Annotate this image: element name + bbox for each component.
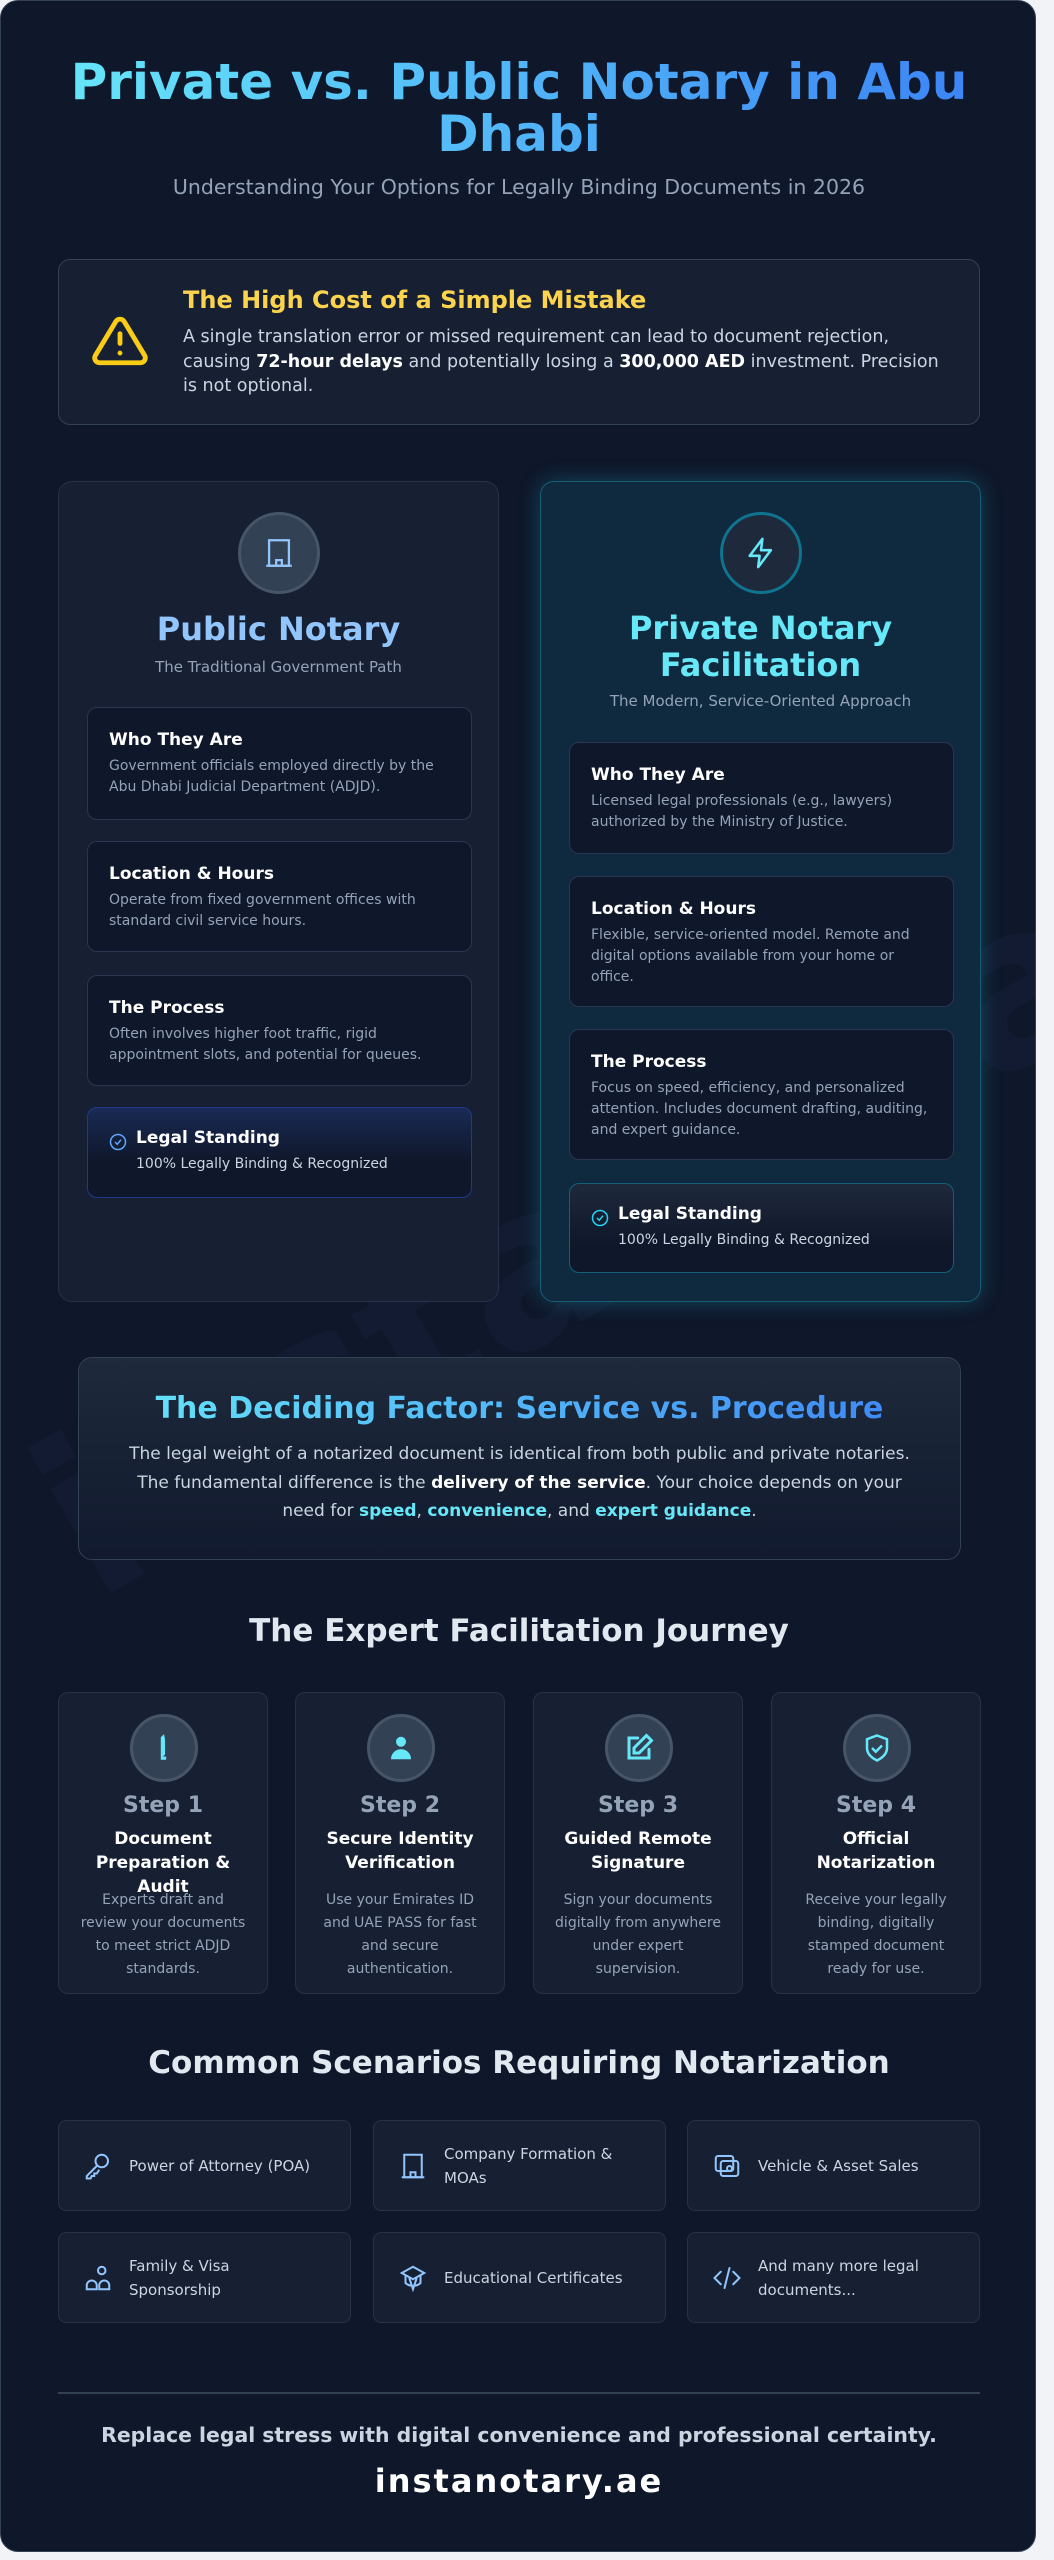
card: process: The Process [591,1052,707,1072]
panel: deciding factor [78,1357,961,1560]
scenario: family [58,2232,351,2323]
scenario: company [373,2120,666,2211]
card: location: Operate from fixed government offices with standard civil service hours. [109,892,416,929]
step 1: Document Preparation & Audit [96,1829,230,1897]
scenario: vehicle [687,2120,980,2211]
card: legal standing [569,1183,954,1273]
card: who: Government officials employed directly by the Abu Dhabi Judicial Department (ADJD). [109,758,434,795]
private subtitle: The Modern, Service-Oriented Approach [610,692,911,710]
scenario: education [373,2232,666,2323]
card: process: Focus on speed, efficiency, and personalized attention. Includes document drafting, auditing, and expert guidance. [591,1080,927,1138]
scenario: company: Company Formation & [444,2144,612,2162]
private heading: Facilitation [660,646,861,684]
panel: private notary [540,481,981,1302]
card: process [87,975,472,1086]
step 1 [58,1692,268,1994]
card: who [87,707,472,820]
step 2: Step 2 [360,1793,440,1818]
step 4 [771,1692,981,1994]
scenario: poa: Power of Attorney (POA) [129,2156,310,2174]
card: who: Licensed legal professionals (e.g., lawyers) authorized by the Ministry of Justice. [591,793,892,830]
step 3: Sign your documents digitally from anywhere under expert supervision. [555,1892,721,1977]
scenario: poa [58,2120,351,2211]
scenario: vehicle: Vehicle & Asset Sales [758,2156,919,2174]
scenario: more: And many more legal [758,2256,919,2274]
subtitle: Understanding Your Options for Legally Binding Documents in 2026 [173,175,865,199]
icon: lightning [720,512,802,594]
card: legal standing: 100% Legally Binding & Recognized [136,1156,388,1172]
card: location [87,841,472,952]
card: legal standing: Legal Standing [618,1204,762,1224]
step 2: Use your Emirates ID and UAE PASS for fast and secure authentication. [323,1892,477,1977]
deciding heading: The Deciding Factor: Service vs. Procedure [156,1391,883,1426]
card: legal standing [87,1107,472,1198]
step 4: Receive your legally binding, digitally stamped document ready for use. [805,1892,947,1977]
step 4: Official Notarization [817,1829,935,1873]
warning heading: The High Cost of a Simple Mistake [183,286,646,314]
card: location [569,876,954,1007]
step 3: Step 3 [598,1793,678,1818]
public subtitle: The Traditional Government Path [155,658,402,676]
deciding text: The legal weight of a notarized document is identical from both public and private notaries. The fundamental difference is the delivery of the service. Your choice depends on your need for speed, convenience, and expert guidance. [129,1444,910,1521]
card: who [569,742,954,854]
icon: building [238,512,320,594]
step 3: Guided Remote Signature [564,1829,712,1873]
panel: public notary [58,481,499,1302]
step 3 [533,1692,743,1994]
public heading: Public Notary [157,610,400,648]
warning text: A single translation error or missed requirement can lead to document rejection, causing 72-hour delays and potentially losing a 300,000 AED investment. Precision is not optional. [183,327,939,396]
card: who: Who They Are [109,730,243,750]
card: location: Location & Hours [591,899,756,919]
card: location: Flexible, service-oriented model. Remote and digital options available from your home or office. [591,927,910,985]
step 4: Step 4 [836,1793,916,1818]
scenario: company: MOAs [444,2168,487,2186]
step 2: Secure Identity Verification [326,1829,474,1873]
card: who: Who They Are [591,765,725,785]
icon: warning [92,316,148,366]
card: location: Location & Hours [109,864,274,884]
card: process: Often involves higher foot traffic, rigid appointment slots, and potential for queues. [109,1026,421,1063]
card: process: The Process [109,998,225,1018]
warning callout [58,259,980,425]
scenario: more [687,2232,980,2323]
scenario: family: Sponsorship [129,2280,221,2298]
footer brand: instanotary.ae [375,2462,663,2500]
step 2 [295,1692,505,1994]
card: legal standing: 100% Legally Binding & Recognized [618,1232,870,1248]
private heading [629,609,892,684]
card: process [569,1029,954,1160]
step 1: Experts draft and review your documents to meet strict ADJD standards. [81,1892,245,1977]
step 1: Step 1 [123,1793,203,1818]
footer tagline: Replace legal stress with digital convenience and professional certainty. [101,2423,937,2447]
scenario: more: documents... [758,2280,856,2298]
card: legal standing: Legal Standing [136,1128,280,1148]
private heading: Private Notary [629,609,892,647]
title: Private vs. Public Notary in Abu Dhabi [71,53,967,163]
scenario: education: Educational Certificates [444,2268,623,2286]
scenario: family: Family & Visa [129,2256,230,2274]
heading: journey: The Expert Facilitation Journey [249,1613,789,1649]
heading: scenarios: Common Scenarios Requiring Notarization [148,2045,890,2081]
